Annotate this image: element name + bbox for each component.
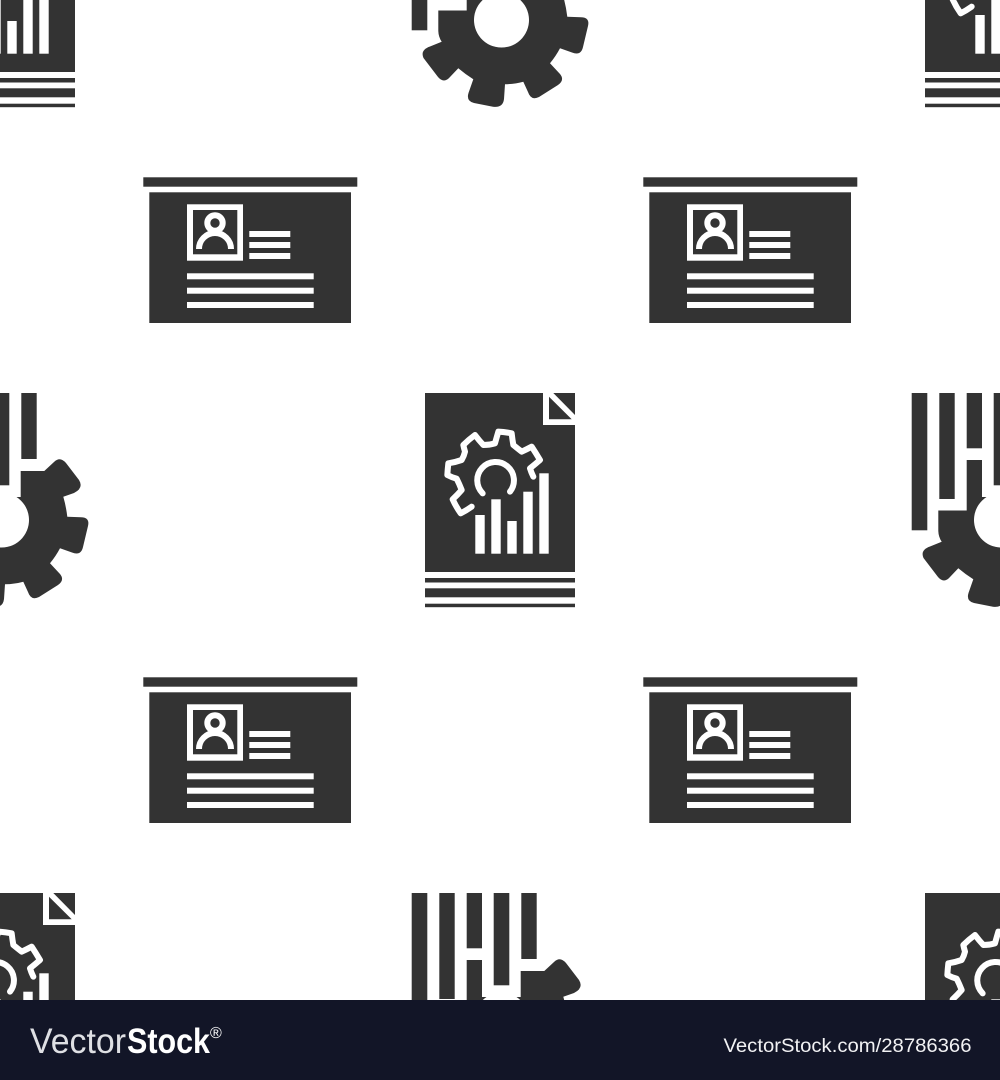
icon: report document, bottom left <box>0 893 75 1080</box>
footer logo: Vector <box>30 1022 126 1061</box>
footer logo <box>30 1022 222 1061</box>
icon: profile card, upper right <box>643 177 857 323</box>
icon: gear and bars, top centre <box>412 0 588 107</box>
icon: gear and bars, middle left <box>0 393 88 607</box>
footer bar <box>0 1000 1000 1080</box>
icon: report document, top left <box>0 0 75 107</box>
icon: report document, centre <box>425 393 575 607</box>
icon: gear and bars, middle right <box>912 393 1000 607</box>
icon: profile card, lower right <box>643 677 857 823</box>
icon: gear and bars, bottom centre <box>412 893 588 1080</box>
footer logo: ® <box>210 1025 222 1042</box>
icon: report document, bottom right <box>925 893 1000 1080</box>
icon: profile card, lower left <box>143 677 357 823</box>
footer logo: Stock <box>127 1022 210 1061</box>
icon: report document, top right <box>925 0 1000 107</box>
footer image id: VectorStock.com/28786366 <box>724 1035 972 1057</box>
icon: profile card, upper left <box>143 177 357 323</box>
